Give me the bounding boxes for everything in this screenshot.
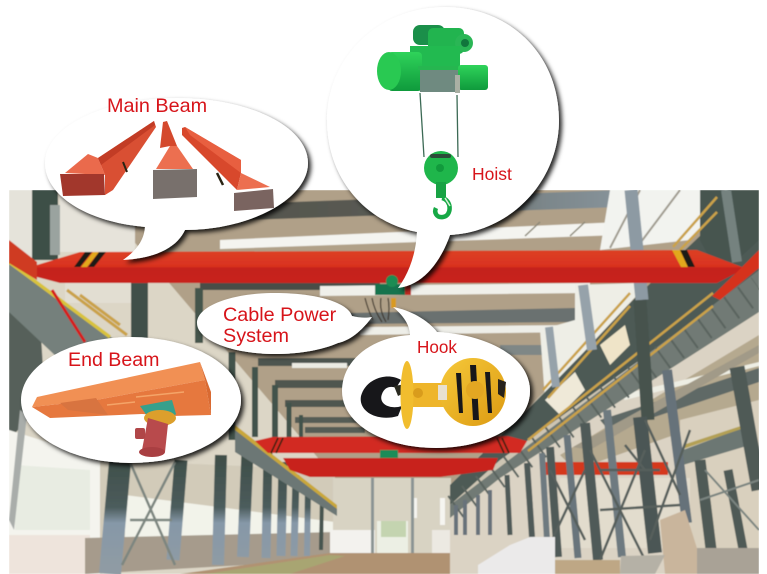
bubble: main beam [45,98,308,260]
panel: end beam callout [21,337,241,463]
main red crane beam [9,240,759,300]
end wall and floor [181,477,452,574]
ceiling [134,190,701,484]
far red cranes [255,436,527,477]
hook block product [361,358,506,429]
heading: main beam: Main Beam [107,95,207,117]
bubble: hook [342,307,530,448]
label: hook: Hook [417,338,457,357]
bubble: end beam [21,337,241,463]
left wall with windows [9,190,337,574]
panel: hook callout [342,307,530,448]
wood and material stacks [478,510,759,574]
right railings [528,197,717,451]
label: cable power system: Cable Power [223,304,337,326]
beam product 3 [182,127,274,211]
label: cable power system: System [223,325,289,347]
steel columns [110,190,759,574]
right side wall and structure [450,190,759,574]
bubble: cable power system [197,293,372,354]
label: hoist: Hoist [472,164,512,184]
panel: hoist callout [327,7,559,288]
end beam product [32,362,211,457]
left runway girder [9,262,337,516]
hoist machine [377,25,488,217]
panel: cable power system callout [197,293,372,354]
panel: main beam callout [45,95,308,260]
beam product 2 [153,121,197,199]
bubble: hoist [327,7,559,288]
trolley and cables on the main beam [365,275,411,322]
background photo: factory hall [9,190,759,574]
beam product 1 [60,121,156,196]
heading: end beam: End Beam [68,349,160,371]
